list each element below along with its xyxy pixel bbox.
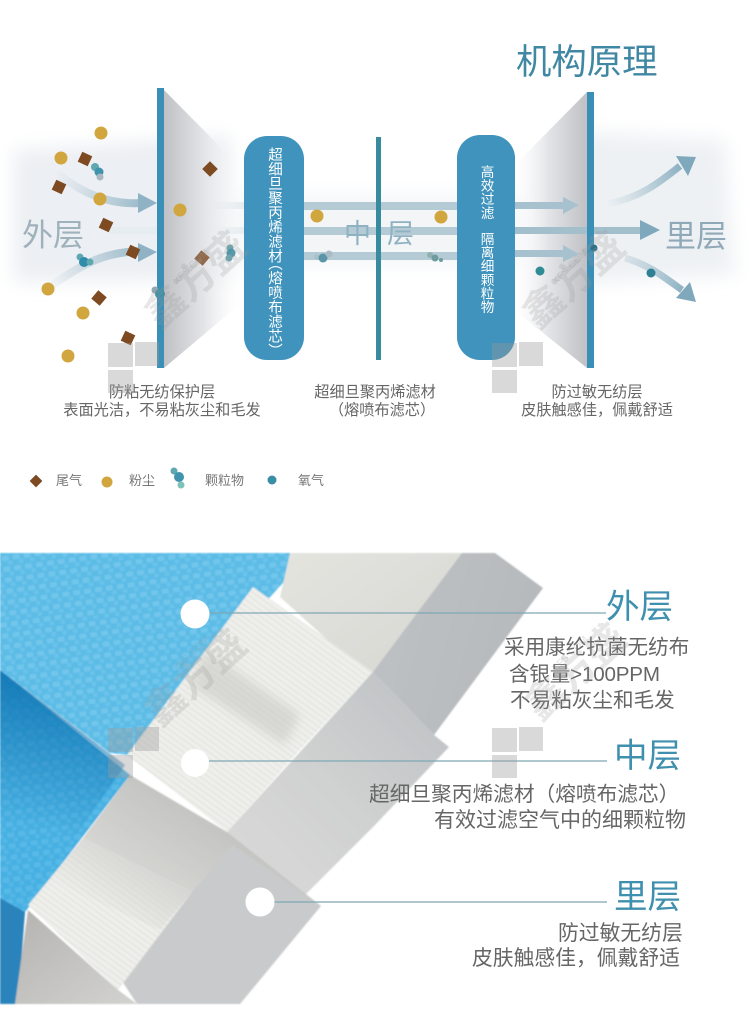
arrow: middle right stream 2 bbox=[515, 220, 660, 240]
label: middle layer: 中 bbox=[344, 219, 371, 249]
legend: oxygen bbox=[268, 473, 324, 488]
label: middle layer: 层 bbox=[387, 219, 414, 249]
left filter wedge bbox=[164, 90, 245, 368]
description: middle layer bbox=[369, 783, 686, 832]
label: outer layer: 外层 bbox=[22, 218, 84, 253]
arrow: middle right stream 1 bbox=[515, 197, 579, 214]
photo: upper white crepe band bbox=[127, 587, 373, 832]
watermark: small domain text: XFS.COM bbox=[550, 634, 590, 674]
arrow: outflow up bbox=[607, 156, 696, 204]
legend: dust bbox=[102, 473, 155, 488]
label: inner layer: 里层 bbox=[665, 219, 727, 254]
middle barrier bbox=[376, 137, 381, 360]
caption: middle layer bbox=[314, 384, 436, 419]
pill: meltblown filter bbox=[244, 136, 304, 360]
description: outer layer bbox=[504, 636, 689, 712]
photo: lower band top fade bbox=[50, 838, 192, 930]
watermark: small domain text: XFS.COM bbox=[171, 247, 211, 287]
legend: oxygen: 氧气 bbox=[298, 473, 324, 488]
right filter wedge bbox=[508, 92, 587, 368]
caption: middle layer: 超细旦聚丙烯滤材 bbox=[314, 384, 436, 401]
pill: meltblown filter: 超细旦聚丙烯滤材 bbox=[266, 147, 282, 263]
photo: light blue fabric bbox=[0, 553, 310, 755]
heading: middle layer: 中层 bbox=[614, 738, 681, 775]
label: middle layer bbox=[344, 219, 414, 249]
watermark: small domain text bbox=[171, 247, 590, 674]
legend bbox=[30, 468, 324, 488]
marker: middle bbox=[181, 749, 607, 777]
particles: exhaust bbox=[52, 152, 218, 345]
description: middle layer: 有效过滤空气中的细颗粒物 bbox=[434, 809, 686, 832]
caption: inner layer bbox=[521, 384, 673, 419]
heading: outer layer: 外层 bbox=[606, 589, 673, 626]
particles: dust bbox=[42, 126, 448, 362]
watermark: small domain text: XFS.COM bbox=[171, 634, 211, 674]
marker: outer bbox=[180, 600, 606, 628]
pill: efficient filtering bbox=[457, 135, 515, 360]
legend: dust: 粉尘 bbox=[129, 473, 155, 488]
description: inner layer bbox=[472, 922, 683, 970]
arrow: lower left inflow bbox=[48, 243, 157, 288]
watermark: brand text: 鑫方盛 bbox=[517, 616, 635, 729]
photo: fabric and gauze layers bbox=[0, 553, 543, 1004]
caption: outer layer: 防粘无纺保护层 bbox=[109, 384, 215, 401]
arrow: upper left inflow bbox=[55, 172, 157, 213]
watermark: brand text: 鑫方盛 bbox=[515, 224, 633, 337]
panel: filtration principle diagram bbox=[14, 42, 735, 419]
photo: bottom left dark blue bbox=[0, 898, 25, 1004]
title: 机构原理 bbox=[516, 42, 658, 82]
legend: exhaust: 尾气 bbox=[56, 473, 82, 488]
airflow bands bbox=[110, 202, 457, 260]
watermark: brand text bbox=[137, 224, 635, 735]
photo: lower band gray tail bbox=[15, 910, 137, 1004]
pill: efficient filtering: 高效过滤 bbox=[478, 164, 494, 221]
description: outer layer: 含银量>100PPM bbox=[509, 663, 660, 686]
panel: mask layers photo bbox=[0, 553, 689, 1004]
particles: clusters bbox=[76, 163, 443, 299]
legend: exhaust bbox=[30, 473, 82, 488]
description: middle layer: 超细旦聚丙烯滤材（熔喷布滤芯） bbox=[369, 783, 679, 806]
pill: meltblown filter: （熔喷布滤芯） bbox=[266, 256, 282, 358]
background haze bbox=[14, 130, 735, 285]
photo: crepe fold shadow bbox=[190, 650, 300, 745]
description: outer layer: 不易粘灰尘和毛发 bbox=[510, 689, 675, 712]
photo: top light gauze bbox=[280, 553, 462, 683]
caption: inner layer: 皮肤触感佳，佩戴舒适 bbox=[521, 402, 673, 419]
watermark: small domain text: XFS.COM bbox=[550, 247, 590, 287]
pill: efficient filtering: 隔离细颗粒物 bbox=[478, 232, 494, 315]
photo: dark blue shadow bbox=[0, 670, 125, 850]
photo: lower shadow zone bbox=[83, 775, 321, 906]
legend: particulate: 颗粒物 bbox=[205, 473, 244, 488]
photo: middle right gauze bbox=[227, 672, 449, 895]
watermark: brand text: 鑫方盛 bbox=[137, 622, 255, 735]
photo: lower white crepe band bbox=[28, 838, 192, 990]
photo: lower gauze bbox=[120, 845, 321, 1004]
photo: base lower blue fabric bbox=[0, 670, 130, 1004]
right blue barrier bbox=[587, 92, 594, 368]
caption: outer layer bbox=[63, 384, 261, 419]
description: outer layer: 采用康纶抗菌无纺布 bbox=[504, 636, 689, 659]
photo: top right gray gauze bbox=[373, 553, 543, 735]
caption: middle layer: （熔喷布滤芯） bbox=[329, 402, 435, 419]
particles: oxygen bbox=[536, 244, 656, 278]
heading: inner layer: 里层 bbox=[614, 879, 681, 916]
watermark: brand text: 鑫方盛 bbox=[137, 224, 255, 337]
caption: outer layer: 表面光洁，不易粘灰尘和毛发 bbox=[63, 402, 261, 419]
legend: particulate bbox=[170, 468, 244, 488]
arrow: middle right stream 3 bbox=[515, 245, 579, 262]
description: inner layer: 皮肤触感佳，佩戴舒适 bbox=[472, 947, 680, 970]
marker: inner bbox=[246, 888, 607, 916]
caption: inner layer: 防过敏无纺层 bbox=[551, 384, 643, 401]
arrow: outflow down bbox=[625, 258, 696, 302]
left blue barrier bbox=[157, 88, 164, 368]
watermarks bbox=[108, 224, 635, 778]
watermark: tile logos bbox=[108, 342, 543, 778]
description: inner layer: 防过敏无纺层 bbox=[558, 922, 683, 945]
